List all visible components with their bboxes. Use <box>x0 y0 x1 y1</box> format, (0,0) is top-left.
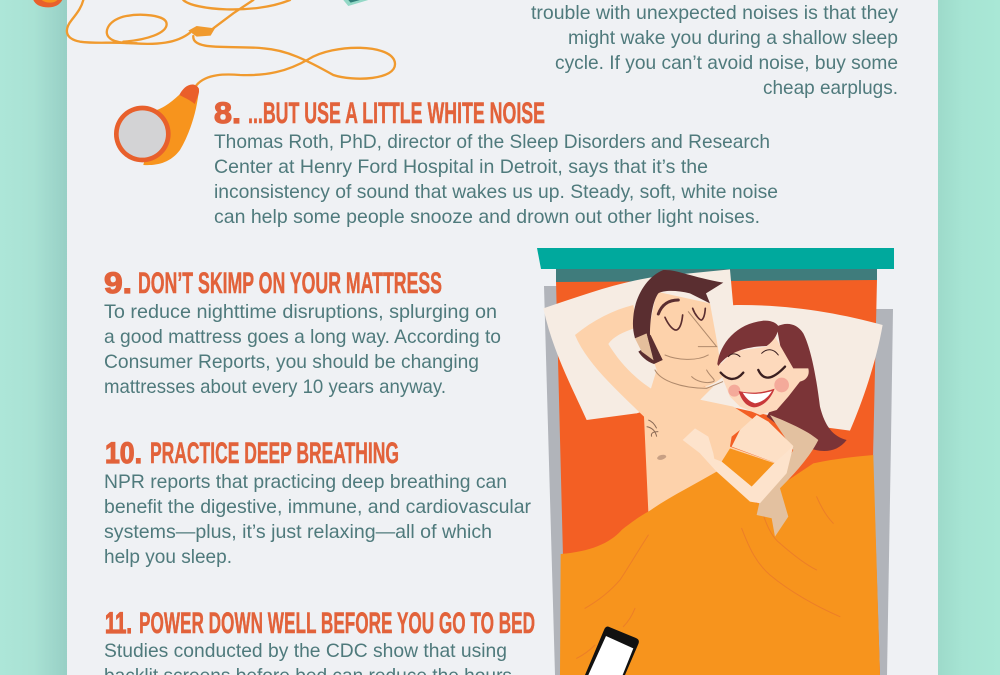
icon: earphones with tangled cord <box>33 0 395 165</box>
tip 10: deep breathing <box>104 437 532 568</box>
body text: tip 9: Consumer Reports, you should be changing <box>104 351 479 373</box>
tip 11: power down <box>104 607 535 675</box>
bed frame <box>537 248 894 675</box>
man: arm and torso <box>575 305 778 517</box>
woman: body and arms <box>683 415 818 537</box>
body text: tip 10: systems—plus, it’s just relaxing—all of which <box>104 521 492 543</box>
tip 7 closing text <box>531 2 898 99</box>
icon: smartphone <box>585 627 639 675</box>
blanket <box>560 455 880 675</box>
tip 9: mattress <box>104 267 501 398</box>
heading: tip 9: 9. <box>104 267 132 300</box>
body text: tip 11 <box>104 640 512 675</box>
heading: tip 10: 10. <box>105 437 142 470</box>
body text: tip 8: can help some people snooze and drown out other light noises. <box>214 206 760 228</box>
illustration: couple sleeping in bed <box>537 248 894 675</box>
pillows <box>543 269 883 431</box>
body text: tip 9: a good mattress goes a long way. According to <box>104 326 501 348</box>
tip 7 closing text: might wake you during a shallow sleep <box>568 27 898 49</box>
heading: tip 9: DON’T SKIMP ON YOUR MATTRESS <box>138 267 442 300</box>
heading: tip 11 <box>105 607 535 640</box>
body text: tip 8: Thomas Roth, PhD, director of the Sleep Disorders and Research <box>214 131 770 153</box>
body text: tip 10: help you sleep. <box>104 546 232 568</box>
heading: tip 8: 8. <box>214 97 241 130</box>
body text: tip 9: To reduce nighttime disruptions, splurging on <box>104 301 497 323</box>
body text: tip 10: NPR reports that practicing deep breathing can <box>104 471 507 493</box>
heading: tip 11: POWER DOWN WELL BEFORE YOU GO TO BED <box>139 607 535 640</box>
heading: tip 8 <box>214 97 545 130</box>
body text: tip 11: Studies conducted by the CDC show that using <box>104 640 507 662</box>
heading: tip 9 <box>104 267 442 300</box>
body text: tip 10: benefit the digestive, immune, and cardiovascular <box>104 496 532 518</box>
tip 7 closing text: cheap earplugs. <box>763 77 898 99</box>
tip 7 closing text: cycle. If you can’t avoid noise, buy some <box>555 52 898 74</box>
body text: tip 8: Center at Henry Ford Hospital in Detroit, says that it’s the <box>214 156 708 178</box>
tip 8: white noise <box>214 97 778 228</box>
body text: tip 10 <box>104 471 532 568</box>
woman: head <box>717 321 809 415</box>
body text: tip 8 <box>214 131 778 228</box>
body text: tip 9 <box>104 301 501 398</box>
heading: tip 11: 11. <box>105 607 132 640</box>
body text: tip 9: mattresses about every 10 years anyway. <box>104 376 446 398</box>
man: head <box>633 270 723 388</box>
heading: tip 10: PRACTICE DEEP BREATHING <box>150 437 399 470</box>
woman: hair back <box>767 324 847 451</box>
body text: tip 8: inconsistency of sound that wakes us up. Steady, soft, white noise <box>214 181 778 203</box>
tip 7 closing text: trouble with unexpected noises is that they <box>531 2 898 24</box>
heading: tip 8: ...BUT USE A LITTLE WHITE NOISE <box>248 97 545 130</box>
heading: tip 10 <box>105 437 399 470</box>
blanket creases <box>577 497 840 658</box>
icon: book corner <box>343 0 368 6</box>
